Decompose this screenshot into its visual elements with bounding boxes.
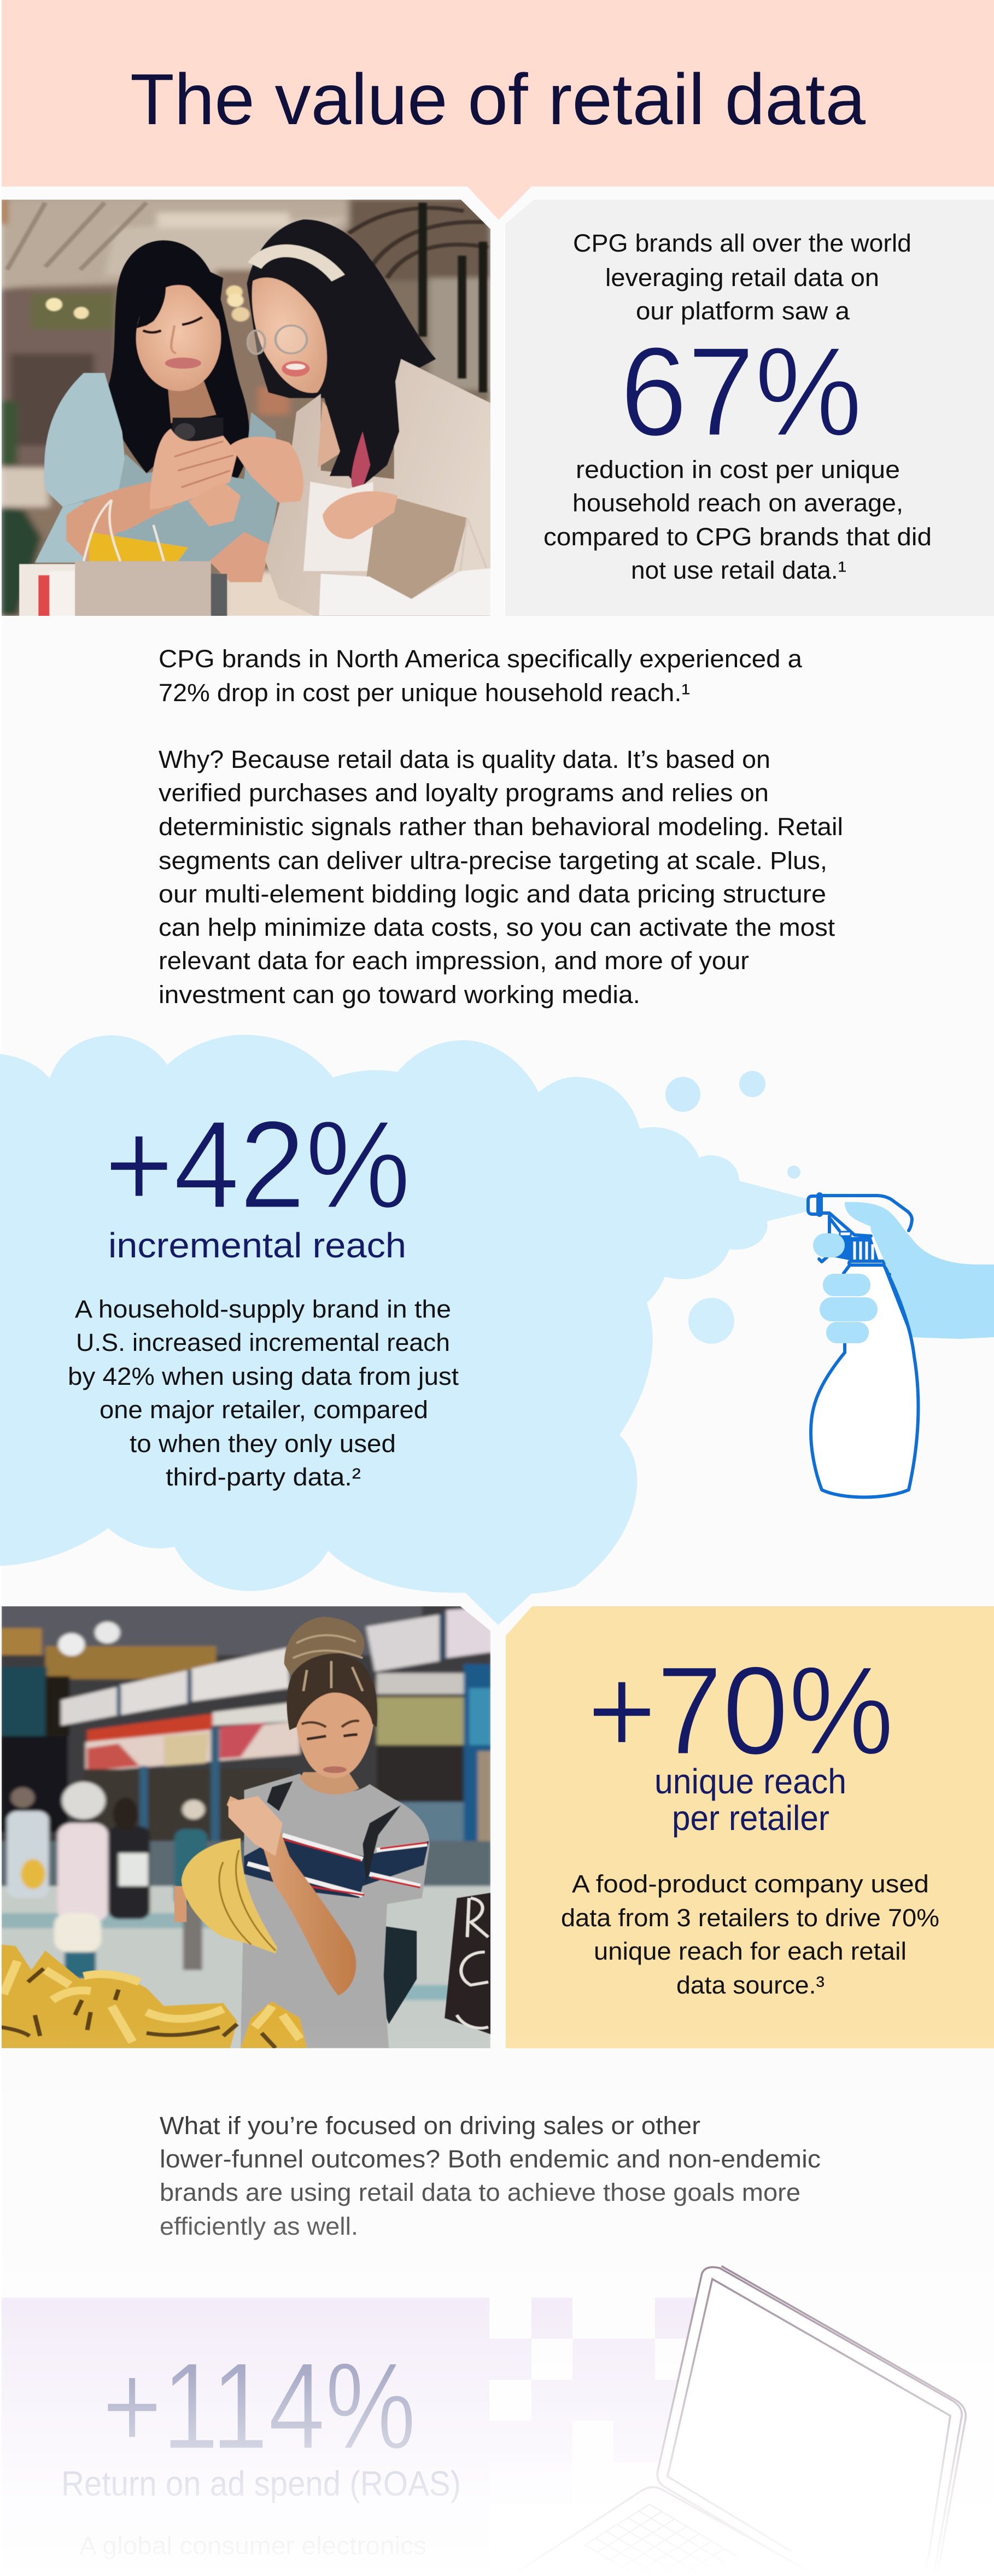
stat description bbox=[68, 1295, 459, 1491]
intro copy: CPG brands all over the world bbox=[573, 229, 911, 257]
stat description: A household-supply brand in the bbox=[75, 1295, 451, 1323]
woman two bbox=[209, 532, 270, 582]
stat description: data from 3 retailers to drive 70% bbox=[561, 1904, 939, 1932]
intro copy: leveraging retail data on bbox=[605, 264, 879, 292]
stat label: return on ad spend: Return on ad spend (ROAS) bbox=[61, 2464, 461, 2503]
intro copy: our platform saw a bbox=[636, 297, 850, 325]
stat label: unique reach per retailer: per retailer bbox=[672, 1798, 829, 1838]
icon: hand holding spray bottle bbox=[808, 1194, 994, 1497]
woman one bbox=[107, 240, 249, 479]
photo: woman choosing bananas at a market bbox=[0, 1604, 492, 2051]
text block: lower-funnel outcomes: What if you’re focused on driving sales or other bbox=[160, 2112, 700, 2140]
stat description bbox=[561, 1870, 939, 1999]
text block: North America and why retail data bbox=[159, 645, 843, 1009]
panel: +70% stat bbox=[506, 1606, 994, 2048]
stat description: third-party data.² bbox=[166, 1463, 361, 1491]
text block: North America and why retail data: Why? Because retail data is quality data. It’s based on bbox=[159, 745, 770, 773]
woman bbox=[375, 1925, 417, 2024]
text block: lower-funnel outcomes: brands are using retail data to achieve those goals more bbox=[160, 2178, 800, 2206]
text block: North America and why retail data: relevant data for each impression, and more of your bbox=[159, 947, 749, 975]
stat description: U.S. increased incremental reach bbox=[76, 1328, 450, 1356]
stat description: A food-product company used bbox=[572, 1870, 929, 1898]
text block: North America and why retail data: 72% drop in cost per unique household reach.¹ bbox=[159, 679, 690, 707]
text block: lower-funnel outcomes bbox=[160, 2112, 821, 2240]
big number: +42%: +42% bbox=[104, 1095, 411, 1234]
stat description: not use retail data.¹ bbox=[631, 556, 846, 584]
text block: lower-funnel outcomes: lower-funnel outcomes? Both endemic and non-endemic bbox=[160, 2145, 821, 2173]
text block: North America and why retail data: investment can go toward working media. bbox=[159, 981, 640, 1009]
big number: +114%: +114% bbox=[102, 2336, 416, 2475]
stat description: one major retailer, compared bbox=[100, 1396, 428, 1424]
text block: North America and why retail data: can help minimize data costs, so you can activate the most bbox=[159, 913, 835, 941]
bottom fade overlay bbox=[0, 2024, 994, 2576]
stat description: household reach on average, bbox=[572, 489, 903, 517]
text block: North America and why retail data: deterministic signals rather than behavioral modeling. Retail bbox=[159, 813, 843, 841]
shopping bags bbox=[89, 532, 188, 561]
bananas in hand bbox=[174, 1886, 186, 1922]
stat description: by 42% when using data from just bbox=[68, 1362, 459, 1390]
text block: North America and why retail data: CPG brands in North America specifically experienced a bbox=[159, 645, 803, 673]
stat label: unique reach per retailer: unique reach bbox=[654, 1762, 846, 1801]
stat label: unique reach per retailer bbox=[654, 1762, 846, 1838]
title: The value of retail data bbox=[130, 59, 866, 139]
intro copy bbox=[573, 229, 911, 325]
header banner bbox=[2, 0, 994, 220]
stat description: to when they only used bbox=[130, 1430, 396, 1458]
icon: laptop outline bbox=[514, 2266, 966, 2576]
shoppers bbox=[62, 1782, 106, 1819]
stat label: incremental reach: incremental reach bbox=[108, 1226, 406, 1265]
panel: spray cloud with +42% stat bbox=[0, 1035, 808, 1625]
text block: lower-funnel outcomes: efficiently as well. bbox=[160, 2212, 358, 2240]
text block: North America and why retail data: segments can deliver ultra-precise targeting at scale. Plus, bbox=[159, 847, 827, 875]
photo: two women shopping looking at a phone bbox=[0, 197, 492, 619]
text block: North America and why retail data: our multi-element bidding logic and data pricing structure bbox=[159, 880, 826, 908]
big number: 67%: 67% bbox=[620, 321, 862, 463]
stat description: data source.³ bbox=[676, 1971, 825, 1999]
stat description: A global consumer electronics bbox=[79, 2532, 426, 2560]
stat description bbox=[543, 456, 932, 584]
panel: +114% ROAS stat with pixel pattern bbox=[2, 2298, 715, 2576]
text block: North America and why retail data: verified purchases and loyalty programs and relies on bbox=[159, 779, 769, 807]
big number: +70%: +70% bbox=[587, 1640, 894, 1781]
panel: 67% reduction stat bbox=[505, 200, 994, 616]
stat description: compared to CPG brands that did bbox=[543, 523, 932, 551]
banana pile bbox=[0, 1944, 237, 2048]
stat description: unique reach for each retail bbox=[594, 1937, 907, 1965]
stat description: reduction in cost per unique bbox=[576, 456, 900, 483]
